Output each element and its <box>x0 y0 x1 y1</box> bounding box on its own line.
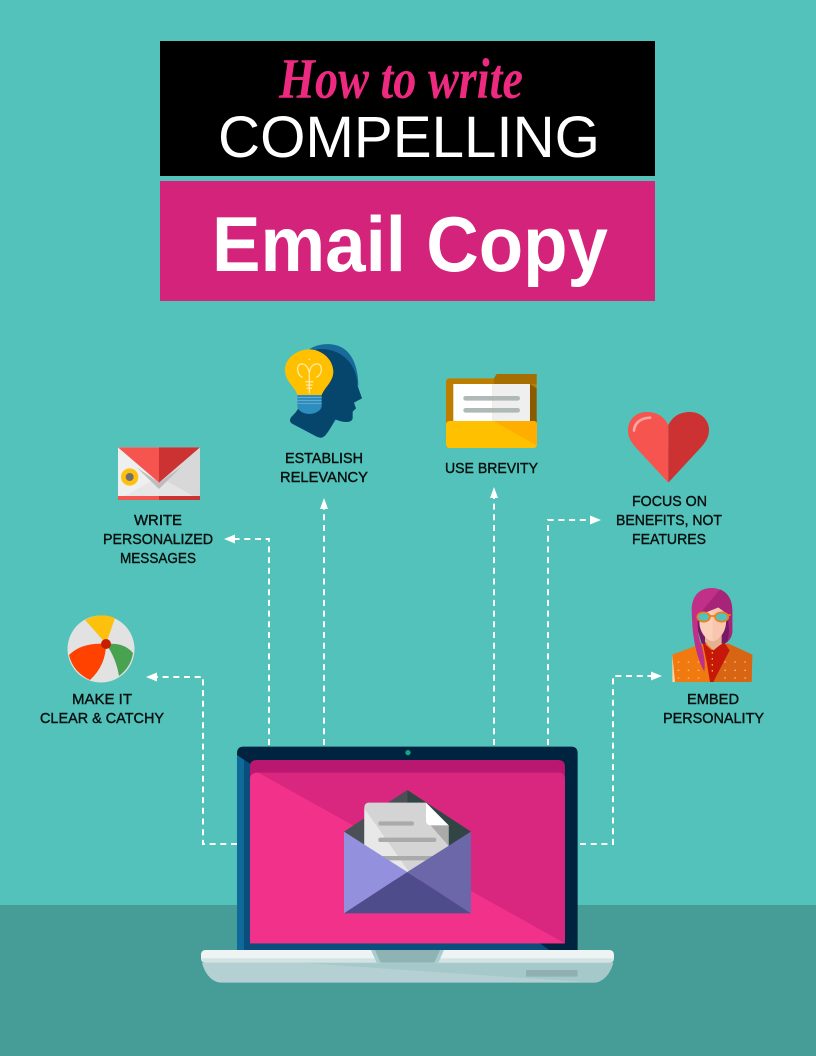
icon: red envelope <box>118 447 200 500</box>
label: establish relevancy: RELEVANCY <box>280 469 368 486</box>
arrow: to establish relevancy <box>320 498 328 745</box>
arrow: to embed personality <box>580 672 662 844</box>
label: embed personality: PERSONALITY <box>663 710 764 727</box>
label: write personalized messages: PERSONALIZED <box>103 531 213 548</box>
label: write personalized messages <box>103 512 213 567</box>
label: focus on benefits, not features: FEATURES <box>632 531 706 548</box>
label: focus on benefits, not features <box>616 493 722 548</box>
arrow: to focus on benefits <box>548 516 601 745</box>
label: use brevity: USE BREVITY <box>445 460 538 477</box>
label: make it clear and catchy: MAKE IT <box>72 691 132 708</box>
arrow: to write personalized messages <box>224 534 269 745</box>
label: make it clear and catchy <box>40 691 164 727</box>
title banner: how to write compelling <box>160 41 655 176</box>
webcam <box>405 750 411 755</box>
open envelope with letter <box>344 790 471 913</box>
laptop screen <box>250 760 565 943</box>
icon: heart <box>628 412 709 483</box>
icon: folder <box>446 374 537 448</box>
arrow: to use brevity <box>490 487 498 745</box>
title banner: how to write compelling: COMPELLING <box>218 105 600 170</box>
label: focus on benefits, not features: FOCUS ON <box>632 493 707 510</box>
icon: head with light bulb <box>285 344 362 438</box>
laptop <box>201 747 614 983</box>
label: focus on benefits, not features: BENEFITS, NOT <box>616 512 722 529</box>
title banner: how to write compelling: How to write <box>278 48 523 111</box>
label: establish relevancy: ESTABLISH <box>285 450 363 467</box>
arrow: to make it clear and catchy <box>146 672 237 844</box>
label: embed personality: EMBED <box>687 691 739 708</box>
label: write personalized messages: WRITE <box>134 512 182 529</box>
label: write personalized messages: MESSAGES <box>120 550 196 567</box>
title banner: email copy <box>160 181 655 301</box>
label: establish relevancy <box>280 450 368 486</box>
icon: woman with glasses <box>672 588 752 682</box>
icon: beach ball <box>68 615 134 682</box>
label: make it clear and catchy: CLEAR & CATCHY <box>40 710 164 727</box>
label: embed personality <box>663 691 764 727</box>
laptop base <box>201 950 614 983</box>
floor band <box>0 905 816 1056</box>
title banner: email copy: Email Copy <box>212 200 608 288</box>
